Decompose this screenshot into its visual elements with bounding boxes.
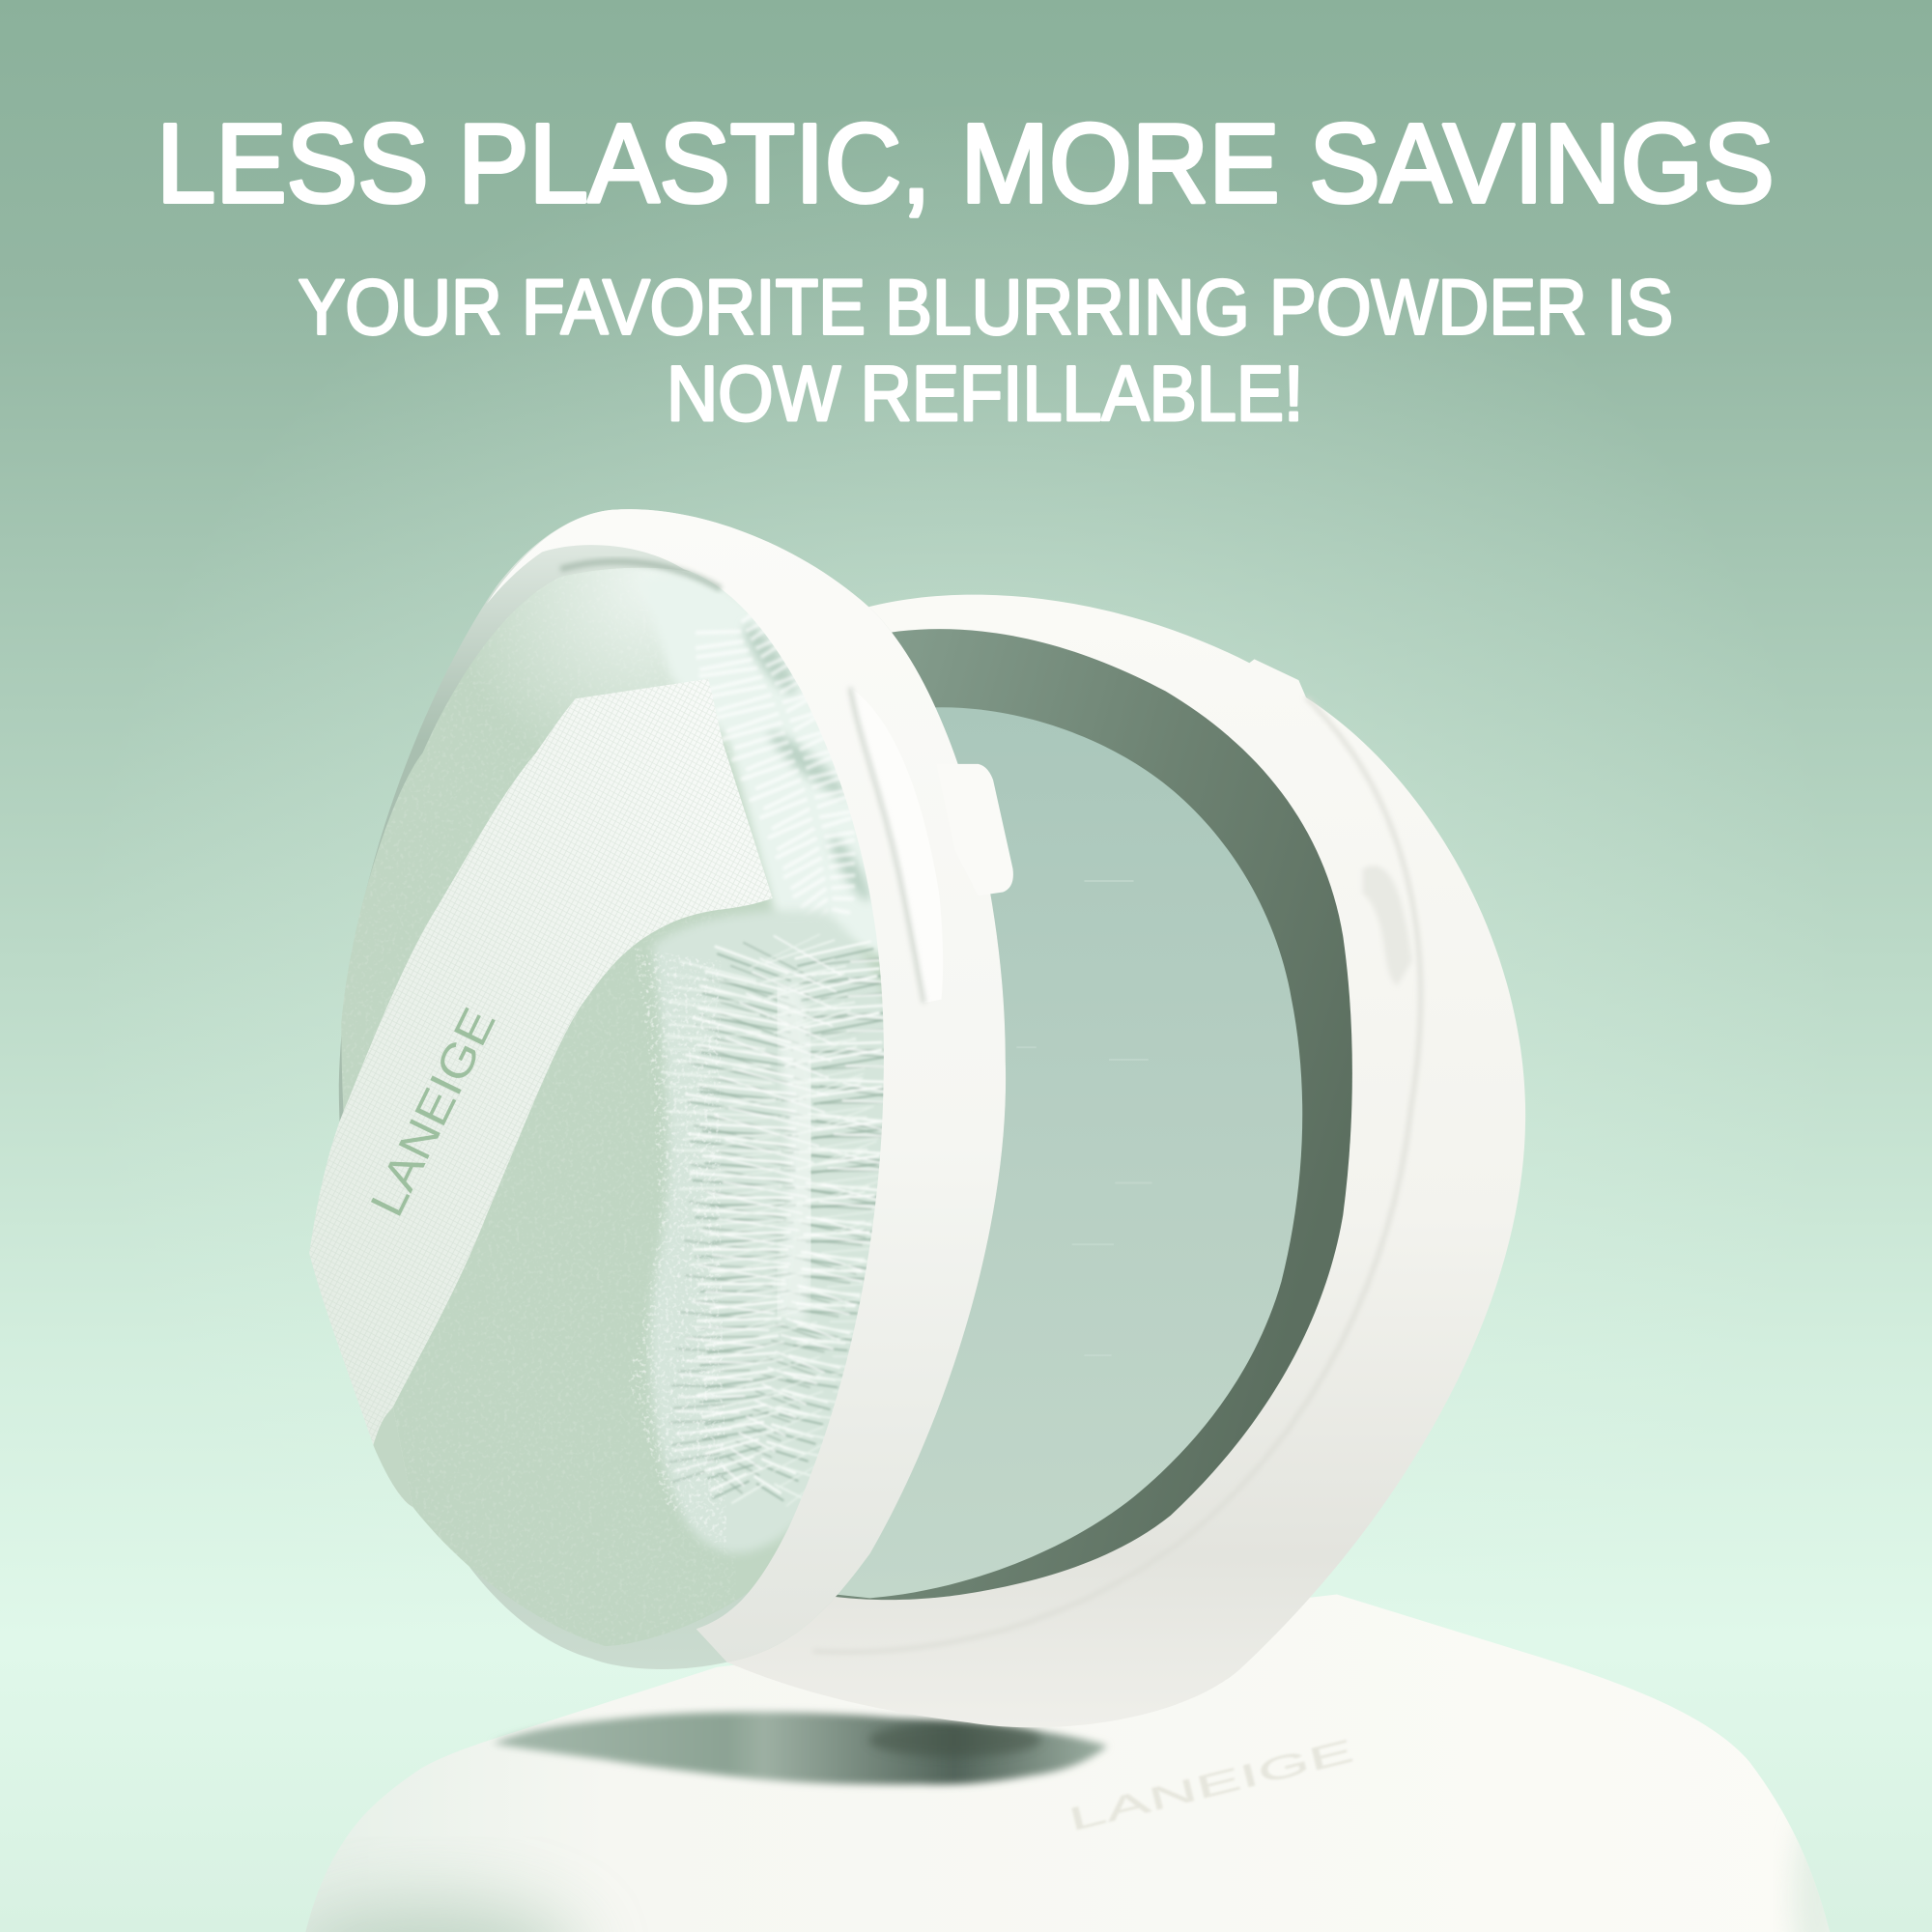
glossy speckle — [629, 949, 727, 1552]
pedestal shadow — [493, 1712, 1108, 1784]
front lid ring with puff — [309, 509, 1013, 1669]
powder disc — [788, 707, 1302, 1598]
puff nap texture — [342, 682, 734, 1638]
ring inner shadow line — [560, 561, 721, 589]
pedestal embossed logo: LANEIGE — [1065, 1733, 1357, 1838]
title: LESS PLASTIC, MORE SAVINGS — [156, 100, 1775, 226]
ring white band — [487, 509, 1006, 1662]
lower fur — [651, 910, 899, 1552]
strap logo: LANEIGE — [360, 1000, 506, 1225]
powder faint marks — [1016, 881, 1152, 1355]
fur bristles — [662, 935, 884, 1505]
puff strap — [309, 679, 773, 1507]
pedestal: compact base — [283, 1595, 1842, 1932]
strap underside fold — [373, 1407, 412, 1507]
compact case: open back shell — [727, 595, 1525, 1727]
shell latch notch — [1363, 866, 1412, 985]
subtitle: YOUR FAVORITE BLURRING POWDER IS — [298, 265, 1673, 352]
ring fin ridge — [850, 688, 943, 1003]
upper fur — [663, 587, 879, 957]
subtitle: NOW REFILLABLE! — [667, 351, 1303, 438]
shell step line — [813, 697, 1421, 1652]
ring locking tab — [936, 764, 1013, 895]
subtitle — [298, 265, 1673, 438]
shell outer body — [727, 595, 1525, 1727]
puff base — [342, 568, 884, 1646]
ring back, grey-green inner wall — [339, 509, 1006, 1669]
shell inner well — [788, 629, 1352, 1600]
